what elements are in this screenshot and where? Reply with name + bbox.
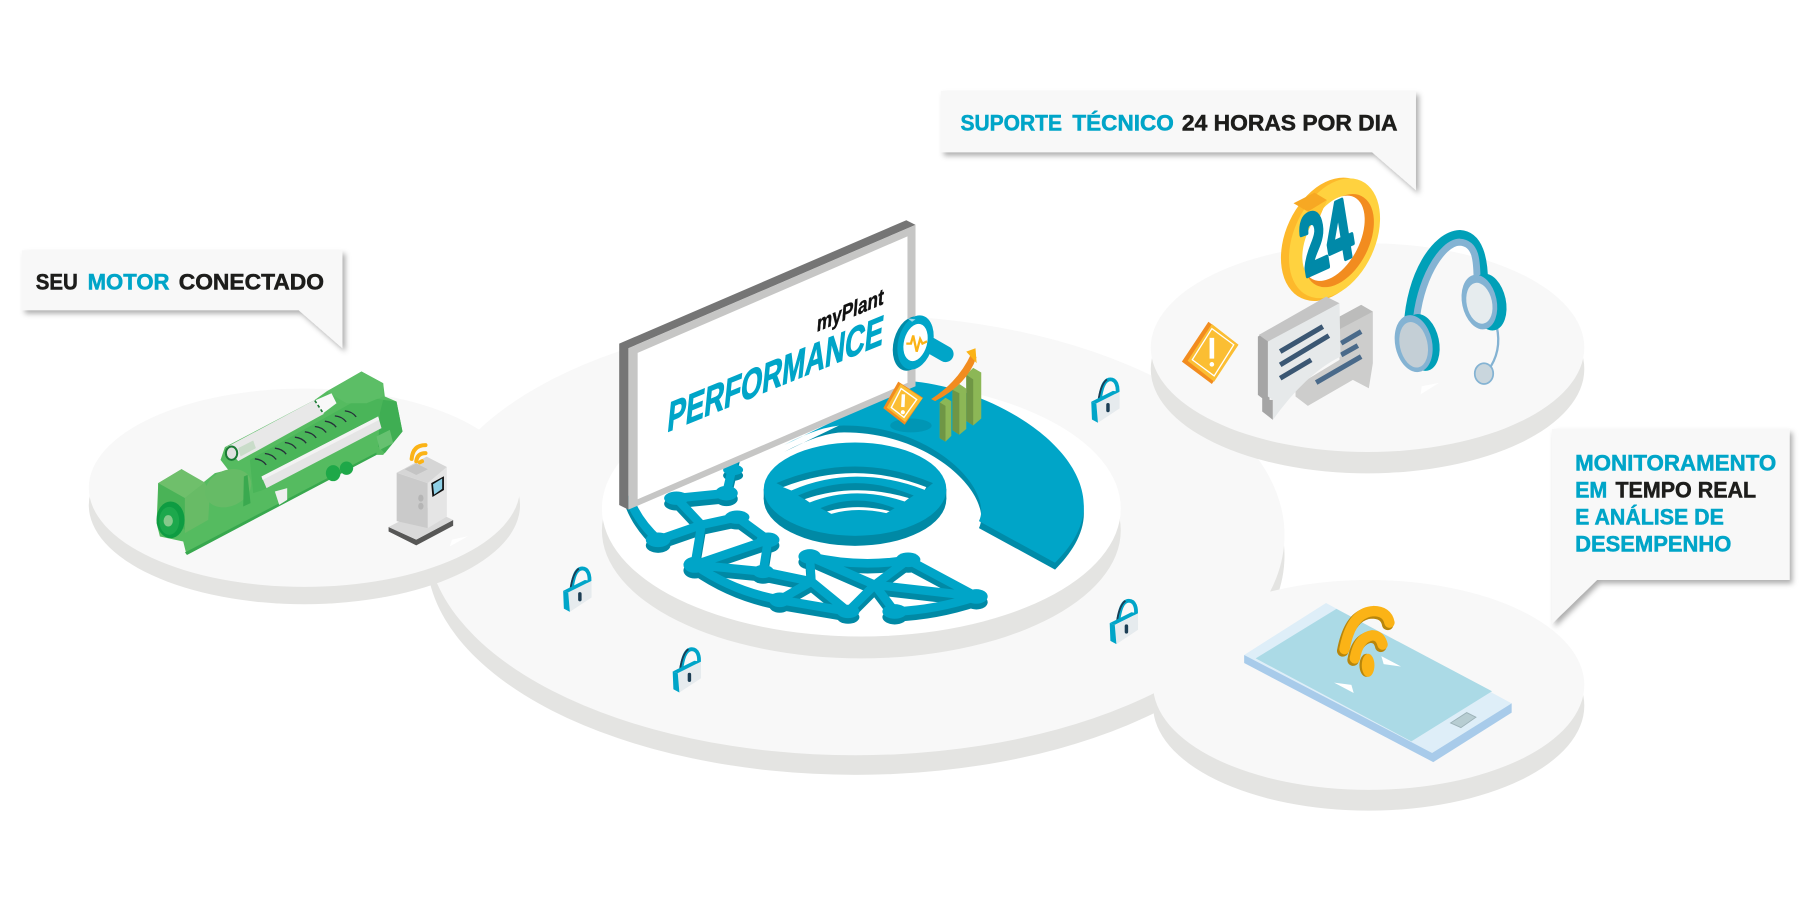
callout: monitoring [1552,429,1790,624]
platform: white centre disc [602,381,1121,658]
icon: magnifier [887,311,946,375]
blue arc segment [784,382,1084,570]
callout: motor: SEU [36,269,78,294]
icon: warning sign [1182,322,1238,384]
lock [1091,379,1120,423]
monitor text: performance: PERFORMANCE [666,307,886,442]
wifi disc [764,443,946,546]
callout: monitoring: DESEMPENHO [1575,532,1731,557]
network mesh [630,453,988,624]
callout: support [941,91,1416,190]
icon: cabinet wifi [412,445,425,462]
callout: support: TÉCNICO [1072,110,1174,135]
control cabinet [389,445,453,545]
platform: mobile disc [1153,580,1584,811]
monitor text: myPlant: myPlant [816,284,885,338]
lock [1110,601,1138,644]
lock [673,649,701,693]
callout: support: SUPORTE [960,110,1062,135]
callout: motor: MOTOR [88,269,170,294]
callout: monitoring: TEMPO REAL [1615,478,1756,503]
platform: support disc [1151,243,1584,473]
engine [157,372,402,555]
icon: 24 hours clock: 24 [1294,181,1358,295]
platform: large central disc [427,315,1285,775]
platform: motor disc [89,389,520,604]
lock [563,568,592,612]
icon: phone wifi [1343,611,1389,660]
callout: monitoring: EM [1575,478,1607,503]
icon: chat bubbles [1258,297,1373,420]
monitor [619,220,916,510]
callout: support: 24 HORAS POR DIA [1182,110,1398,135]
bar chart [940,368,981,442]
callout: monitoring: MONITORAMENTO [1575,450,1776,475]
arrow: growth [933,348,977,400]
callout: motor: CONECTADO [179,269,324,294]
icon: warning sign on monitor [883,382,932,432]
callout: motor [22,250,342,348]
icon: 24 hours clock [1262,162,1398,316]
callout: monitoring: E ANÁLISE DE [1575,505,1724,530]
icon: headset [1390,235,1512,384]
icon: smartphone [1244,603,1512,762]
